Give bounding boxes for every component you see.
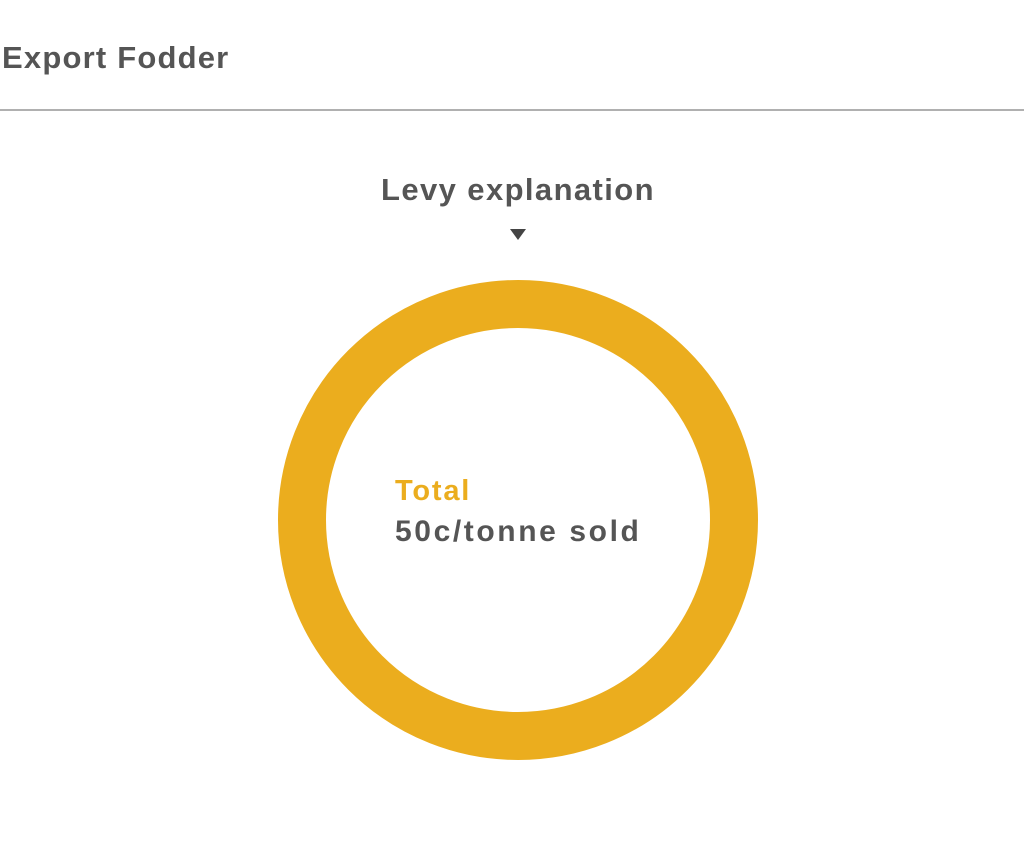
label: total — [395, 475, 641, 548]
heading: levy explanation: Levy explanation — [381, 172, 655, 207]
label: total: Total — [395, 475, 471, 507]
title: Export Fodder — [2, 40, 229, 75]
ring: total — [302, 304, 734, 736]
label: total: 50c/tonne sold — [395, 515, 641, 548]
icon: down triangle — [510, 229, 526, 240]
